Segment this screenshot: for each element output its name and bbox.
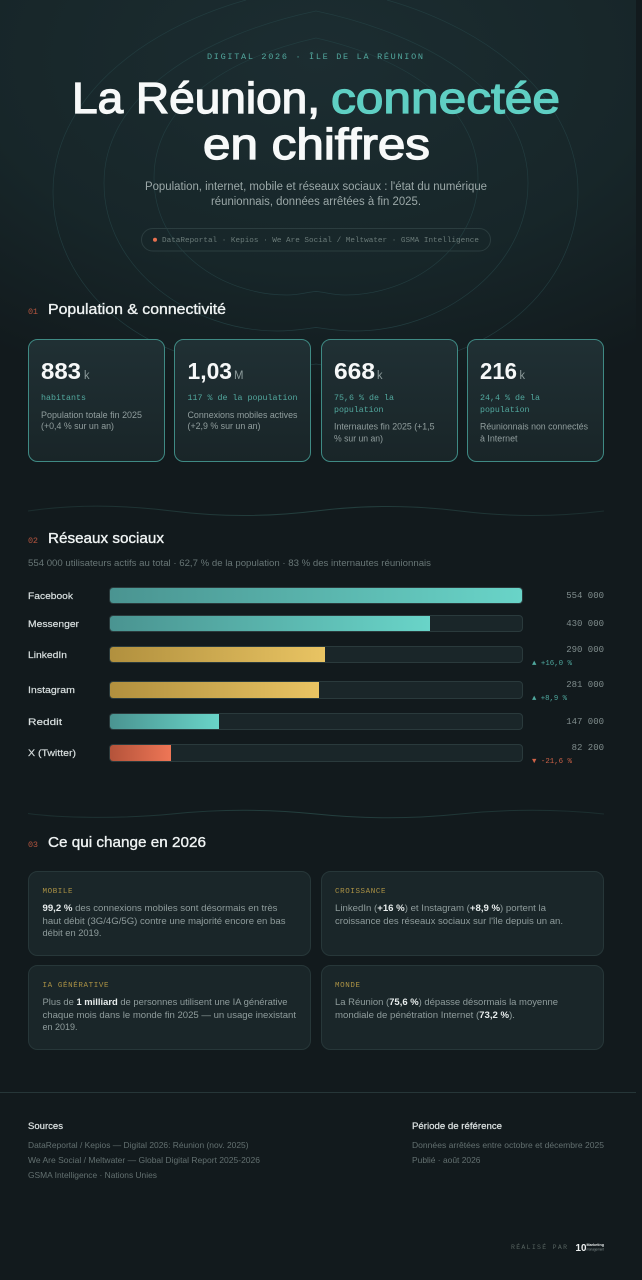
stat card: habitants: habitants [41,393,86,403]
note card: mobile: 99,2 % des connexions mobiles sont désormais en très [42,903,278,913]
bar: Instagram: 281 000 [566,680,604,690]
bar: Facebook: 554 000 [566,591,604,601]
subtitle: Population, internet, mobile et réseaux sociaux : l'état du numérique [145,181,487,193]
hero glow [0,0,636,410]
kicker: DIGITAL 2026 · ÎLE DE LA RÉUNION [207,51,423,62]
stat card: internautes: k [377,370,383,382]
title [72,74,560,169]
stat card: non connectés: 216 [480,358,517,384]
note card: IA générative: Plus de 1 milliard de personnes utilisent une IA générative [42,997,288,1007]
note card: croissance [322,872,604,956]
stat card: internautes: Internautes fin 2025 (+1,5 [334,422,434,432]
footer: sources [28,1121,260,1180]
note card: mobile: MOBILE [42,888,73,896]
footer: reference period: Publié · août 2026 [412,1155,481,1165]
stat card: habitants [28,340,164,462]
footer: sources: Sources [28,1121,64,1131]
footer: sources: DataReportal / Kepios — Digital 2026: Réunion (nov. 2025) [28,1140,249,1150]
subtitle: réunionnais, données arrêtées à fin 2025. [211,196,421,208]
footer credit [511,1242,605,1254]
stat card: non connectés: Réunionnais non connectés [480,422,588,432]
stat card: non connectés: k [520,370,525,382]
stat card: internautes: 75,6 % de la [334,393,394,403]
stat card: non connectés: 24,4 % de la [480,393,540,403]
bar: Facebook [28,588,604,604]
section 2 heading [28,530,432,568]
note card: IA générative: chaque mois dans le monde fin 2025 — un usage inexistant [42,1010,296,1020]
bar: Facebook: Facebook [28,591,73,602]
bar: Instagram [28,680,604,703]
section 1 heading: 01 [28,307,38,317]
stat card: internautes [322,340,458,462]
footer: reference period [412,1121,604,1165]
icon: marketing management logo [576,1242,605,1254]
note card: monde [322,966,604,1050]
source pill [142,228,490,251]
bar: LinkedIn: 290 000 [566,645,604,655]
stat card: connexions mobiles [174,340,310,462]
stat card: connexions mobiles: Connexions mobiles actives [188,410,298,420]
note card: croissance: CROISSANCE [335,888,386,896]
bar: Reddit [28,714,604,730]
section 3 heading: 03 [28,840,38,850]
footer credit: RÉALISÉ PAR [511,1243,567,1251]
icon: marketing management logo: 10 [576,1243,587,1254]
stat card: connexions mobiles: 1,03 [188,358,232,384]
title: connectée [331,74,560,123]
bar: LinkedIn: ▲ +16,0 % [532,660,572,668]
note card: monde: La Réunion (75,6 %) dépasse désormais la moyenne [335,997,558,1007]
icon: marketing management logo: management [586,1248,604,1252]
icon: marketing management logo: Marketing [586,1242,605,1247]
footer: sources: We Are Social / Meltwater — Global Digital Report 2025-2026 [28,1155,260,1165]
note card: IA générative: en 2019. [42,1022,78,1032]
stat card: habitants: 883 [41,358,81,384]
section 2 heading: 02 [28,536,38,546]
stat card: non connectés: à Internet [480,434,518,444]
bar: Messenger: Messenger [28,619,79,630]
subtitle [145,181,487,208]
bar: LinkedIn [28,645,604,668]
note card: IA générative [28,966,310,1050]
note card: mobile: débit en 2019. [42,928,102,938]
source pill: DataReportal · Kepios · We Are Social / Meltwater · GSMA Intelligence [162,237,479,245]
note card: monde: mondiale de pénétration Internet ( 73,2 %). [335,1010,515,1020]
bar: Messenger: 430 000 [566,619,604,629]
topographic contour rings [53,0,578,368]
footer: reference period: Période de référence [412,1121,502,1131]
footer: sources: GSMA Intelligence · Nations Unies [28,1170,157,1180]
bar: X (Twitter): 82 200 [572,743,604,753]
note card: mobile: haut débit (3G/4G/5G) contre une majorité encore en bas [42,916,286,926]
bar: Messenger [28,616,604,632]
stat card: internautes: 668 [334,358,375,384]
bar: X (Twitter): X (Twitter) [28,748,76,759]
stat card: non connectés [468,340,604,462]
stat card: habitants: k [84,370,90,382]
section 2 heading: Réseaux sociaux [48,530,165,547]
bar: Instagram: ▲ +8,9 % [532,695,567,703]
stat card: habitants: (+0,4 % sur un an) [41,421,114,431]
note card: monde: MONDE [335,982,360,990]
note card: croissance: croissance des réseaux sociaux sur l'île depuis un an. [335,916,563,926]
stat card: connexions mobiles: M [234,370,244,382]
stat card: connexions mobiles: 117 % de la population [188,393,298,403]
bar chart: social networks [28,588,604,766]
title: La Réunion, [72,74,320,123]
note card: IA générative: IA GÉNÉRATIVE [42,981,109,990]
stat card: internautes: % sur un an) [334,434,383,444]
stat card: habitants: Population totale fin 2025 [41,410,142,420]
bar: LinkedIn: LinkedIn [28,650,67,661]
stat card: connexions mobiles: (+2,9 % sur un an) [188,421,260,431]
bar: Instagram: Instagram [28,685,75,696]
section 2 subtitle: 554 000 utilisateurs actifs au total · 62,7 % de la population · 83 % des internautes réunionnais [28,558,432,568]
bar: X (Twitter) [28,743,604,766]
section 3 heading: Ce qui change en 2026 [48,834,206,851]
note card: croissance: LinkedIn (+16 %) et Instagram ( +8,9 %) portent la [335,903,547,913]
bar: Reddit: 147 000 [566,717,604,727]
stat card: internautes: population [334,405,384,415]
note card: mobile [28,872,310,956]
hero header [72,51,560,251]
section 1 heading: Population & connectivité [48,301,226,318]
stat card: non connectés: population [480,405,530,415]
bar: X (Twitter): ▼ -21,6 % [532,758,572,766]
footer: reference period: Données arrêtées entre octobre et décembre 2025 [412,1140,604,1150]
title: en chiffres [203,120,430,169]
bar: Reddit: Reddit [28,717,62,728]
